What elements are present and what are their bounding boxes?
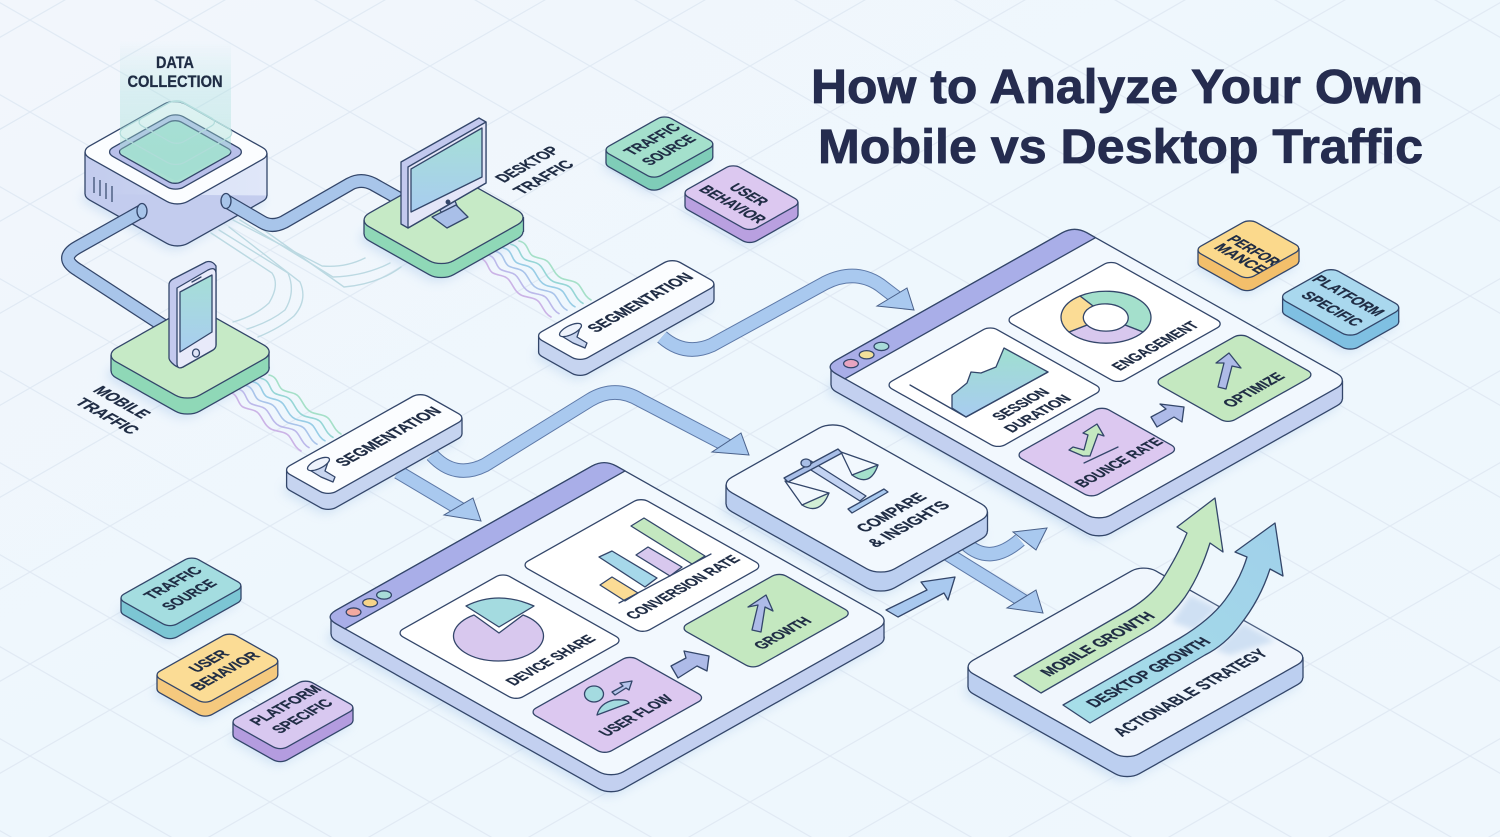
panel: session duration: DURATION [1001, 393, 1076, 435]
tag: platform specific (top right): SPECIFIC [1297, 290, 1366, 329]
tag: platform specific (lower) [229, 679, 357, 764]
arrow: desktop growth: DESKTOP GROWTH [1082, 635, 1215, 710]
title: How to Analyze Your Own [811, 61, 1423, 114]
icon: mobile phone [169, 262, 216, 368]
label: mobile traffic: MOBILE [89, 384, 155, 421]
tag: performance: PERFOR [1223, 234, 1284, 268]
soft drop shadows [76, 131, 1400, 800]
tag: user behavior (top) [681, 164, 802, 245]
tag: traffic source (top) [602, 115, 717, 192]
tag: performance: MANCE [1210, 242, 1271, 276]
compare and insights card [718, 420, 996, 596]
panel: growth [680, 572, 852, 669]
tag: user behavior (lower): USER [186, 648, 234, 675]
server screen [116, 119, 234, 185]
label: mobile traffic [71, 384, 155, 437]
dashboard: mobile [324, 459, 891, 796]
pie chart [454, 598, 544, 661]
icon: funnel [558, 321, 587, 348]
tag: user behavior (top): BEHAVIOR [695, 184, 770, 226]
arrow: compare to strategy [946, 553, 1043, 613]
label: bounce rate: BOUNCE RATE [1072, 436, 1168, 490]
wavy flow: mobile to segmentation [229, 375, 341, 451]
actionable strategy card [961, 564, 1310, 781]
segmentation card: desktop [534, 258, 718, 378]
label: growth: GROWTH [751, 615, 816, 652]
tag: platform specific (lower): PLATFORM [247, 683, 326, 728]
data beam with label: DATA [156, 53, 194, 72]
panel: user flow [529, 655, 706, 755]
faded signal lines from server [211, 220, 401, 337]
wavy flow: desktop to segmentation [479, 241, 591, 317]
label: user flow: USER FLOW [596, 693, 678, 739]
server: data collection [79, 98, 273, 249]
label: desktop traffic: TRAFFIC [509, 158, 579, 197]
label: segmentation: SEGMENTATION [331, 404, 446, 469]
panel: device share [396, 573, 623, 701]
server top face [79, 98, 273, 207]
arrow: desktop segmentation to desktop dashboard [662, 276, 914, 350]
panel: bounce rate [1015, 406, 1179, 498]
tag: traffic source (top): SOURCE [639, 133, 701, 168]
label: actionable strategy: ACTIONABLE STRATEGY [1108, 646, 1273, 739]
panel: optimize [1154, 333, 1315, 424]
tag: performance [1194, 219, 1303, 293]
arrow shadows on card [1172, 595, 1275, 655]
data beam with label [120, 40, 231, 181]
title: Mobile vs Desktop Traffic [818, 121, 1423, 174]
window dots [841, 341, 892, 369]
panel: conversion rate [521, 497, 763, 634]
label: conversion rate: CONVERSION RATE [623, 553, 745, 622]
tag: traffic source (lower): SOURCE [159, 578, 222, 613]
arrow: desktop growth [1063, 523, 1283, 723]
icon: up arrow [748, 595, 773, 632]
label: mobile traffic: TRAFFIC [71, 396, 144, 437]
icon: user [584, 681, 632, 715]
tag: user behavior (top): USER [725, 182, 772, 208]
area chart [952, 348, 1048, 417]
icon: up arrow [1216, 353, 1241, 389]
arrow: mobile segmentation to mobile dashboard [398, 472, 481, 521]
label: engagement: ENGAGEMENT [1109, 319, 1204, 373]
tag: platform specific (top right): PLATFORM [1308, 274, 1388, 319]
icon: balance scale [784, 449, 888, 513]
label: optimize: OPTIMIZE [1220, 371, 1290, 410]
title bar [824, 226, 1095, 379]
port [221, 194, 231, 208]
window dots [343, 589, 394, 618]
tag: user behavior (lower) [153, 632, 282, 718]
icon: funnel [306, 455, 335, 482]
arrow: mobile growth: MOBILE GROWTH [1036, 609, 1159, 679]
label: session duration: SESSION [989, 386, 1054, 423]
ghost rings [115, 98, 237, 167]
donut chart [1061, 291, 1151, 343]
arrow: mobile growth [1014, 498, 1223, 693]
label: compare and insights: COMPARE [852, 490, 931, 535]
tag: traffic source (lower) [117, 556, 245, 641]
arrow: compare to desktop dashboard side [966, 528, 1047, 554]
tag: traffic source (lower): TRAFFIC [141, 565, 207, 602]
arrow: mobile dashboard to compare [886, 577, 955, 617]
label: compare and insights: & INSIGHTS [863, 498, 954, 550]
label: device share: DEVICE SHARE [503, 633, 600, 688]
server screen ring [105, 112, 246, 192]
title bar [324, 459, 625, 629]
port [137, 204, 147, 218]
title [811, 61, 1423, 174]
arrow: user flow to growth [671, 651, 709, 678]
panel: engagement [1005, 260, 1224, 384]
tag: user behavior (lower): BEHAVIOR [188, 650, 265, 693]
label: desktop traffic [491, 144, 579, 197]
tag: platform specific (top right) [1278, 267, 1403, 352]
icon: desktop monitor [401, 118, 486, 228]
label: desktop traffic: DESKTOP [491, 144, 564, 185]
panel: session duration [885, 326, 1103, 449]
arrow: mobile segmentation to compare [432, 392, 749, 471]
server vents [94, 177, 112, 202]
cable: server to mobile [68, 204, 170, 330]
dashboard: desktop [824, 226, 1349, 540]
data beam with label: COLLECTION [128, 72, 222, 91]
desktop platform [357, 170, 530, 282]
cable: server to desktop [221, 181, 405, 225]
icon: bounce [1069, 424, 1118, 463]
mobile platform [104, 305, 276, 418]
tag: platform specific (lower): SPECIFIC [269, 697, 338, 736]
segmentation card: mobile [282, 392, 466, 512]
label: segmentation: SEGMENTATION [583, 270, 698, 335]
tag: traffic source (top): TRAFFIC [621, 121, 685, 158]
bar chart [599, 518, 711, 603]
arrow: bounce to optimize [1151, 404, 1184, 427]
